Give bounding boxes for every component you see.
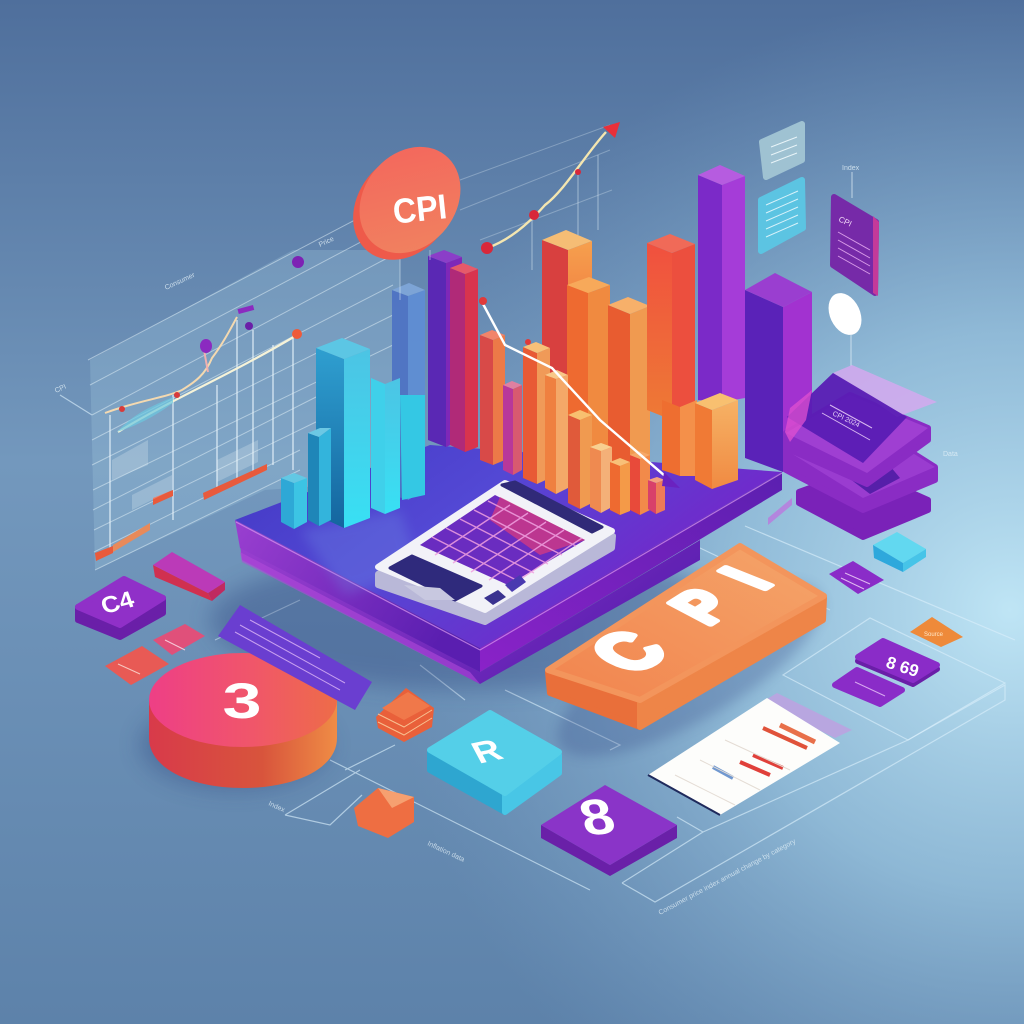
button letters: I — [704, 560, 789, 597]
report card — [648, 693, 852, 815]
floating labels: Consumer — [164, 272, 197, 292]
connector — [768, 498, 792, 525]
chart markers — [119, 256, 304, 412]
floating card: cyan — [761, 180, 803, 251]
bar: small blue two — [308, 428, 331, 526]
bar: purple back left — [428, 250, 462, 447]
chart data cells — [112, 440, 258, 510]
chart lines — [105, 317, 297, 432]
floating labels: Index — [842, 165, 860, 172]
small orange tag — [910, 617, 963, 647]
trend line up with arrow — [400, 122, 620, 300]
red tag two — [153, 624, 205, 655]
bar: red tall — [647, 234, 695, 420]
CPI circle badge: CPI — [391, 187, 449, 232]
big CPI button — [535, 546, 845, 788]
orange stack — [376, 688, 434, 742]
stacked purple layers — [785, 365, 937, 537]
floating labels: CPI — [54, 384, 67, 395]
floor wireframe panels — [60, 395, 1015, 902]
screen sheet — [787, 373, 907, 463]
panel: translucent line chart — [88, 200, 400, 570]
trend line down — [479, 297, 680, 488]
floating labels: Price — [318, 236, 335, 249]
small purple tag — [829, 561, 884, 594]
keypad — [420, 495, 585, 585]
platform — [235, 445, 782, 684]
blue bars — [281, 338, 425, 529]
floating card: purple — [833, 197, 879, 296]
glass sheet — [833, 365, 937, 417]
small floor labels: Index — [267, 800, 286, 814]
bar: cyan wide — [371, 378, 400, 514]
left tile: purple: C4 — [98, 587, 138, 620]
platform reflection — [300, 510, 420, 595]
button letters: P — [654, 580, 750, 633]
red cylinder with 3 — [140, 653, 337, 790]
front orange bars — [480, 330, 665, 515]
small purple cards right: 8 69 — [884, 653, 921, 681]
red tag one — [105, 646, 169, 685]
small floor labels: Consumer price index annual change by category — [658, 838, 797, 917]
layer top — [786, 395, 928, 484]
CPI circle badge — [332, 127, 481, 280]
button letters — [572, 560, 789, 684]
bar: purple tall — [698, 165, 745, 402]
bar: purple right — [745, 273, 812, 472]
layer mid — [786, 420, 935, 510]
bar: orange low — [662, 393, 738, 489]
cyan block: R — [466, 734, 509, 770]
bar: translucent blue — [392, 283, 425, 500]
calculator — [378, 482, 613, 622]
display — [502, 482, 602, 532]
left tile: purple — [78, 579, 163, 637]
bar: small blue one — [281, 473, 307, 529]
cyan block — [430, 713, 559, 812]
small floor labels: Inflation data — [426, 840, 466, 864]
back bars — [392, 165, 812, 500]
bar: crimson — [450, 263, 478, 452]
shadow: platform — [210, 550, 750, 690]
white oval — [822, 288, 868, 340]
purple banner — [218, 605, 372, 710]
floating card: purple: CPI — [837, 215, 853, 228]
small cyan cube — [873, 532, 926, 572]
floating labels — [54, 165, 958, 458]
bar: orange three — [608, 297, 650, 476]
chart small red bars — [95, 464, 267, 561]
big pad — [390, 556, 481, 600]
orange gem — [354, 788, 414, 838]
small floor labels — [267, 800, 797, 917]
report bars — [713, 725, 815, 778]
chart grid — [88, 200, 393, 570]
layer bottom — [799, 470, 928, 537]
bar: middle orange — [567, 277, 610, 476]
purple tile with 8 — [541, 785, 677, 876]
left tile: pink — [153, 552, 225, 601]
red cylinder with 3: 3 — [222, 673, 262, 729]
button letters: C — [572, 620, 685, 684]
small purple cards right — [835, 641, 937, 704]
floating card: grey — [762, 124, 802, 177]
bar: tall orange — [542, 230, 592, 420]
purple tile with 8: 8 — [573, 787, 621, 847]
small orange tag: Source — [924, 632, 944, 638]
floating labels: Data — [943, 451, 958, 458]
bar: big blue — [316, 338, 370, 528]
screen sheet: CPI 2024 — [831, 410, 861, 429]
